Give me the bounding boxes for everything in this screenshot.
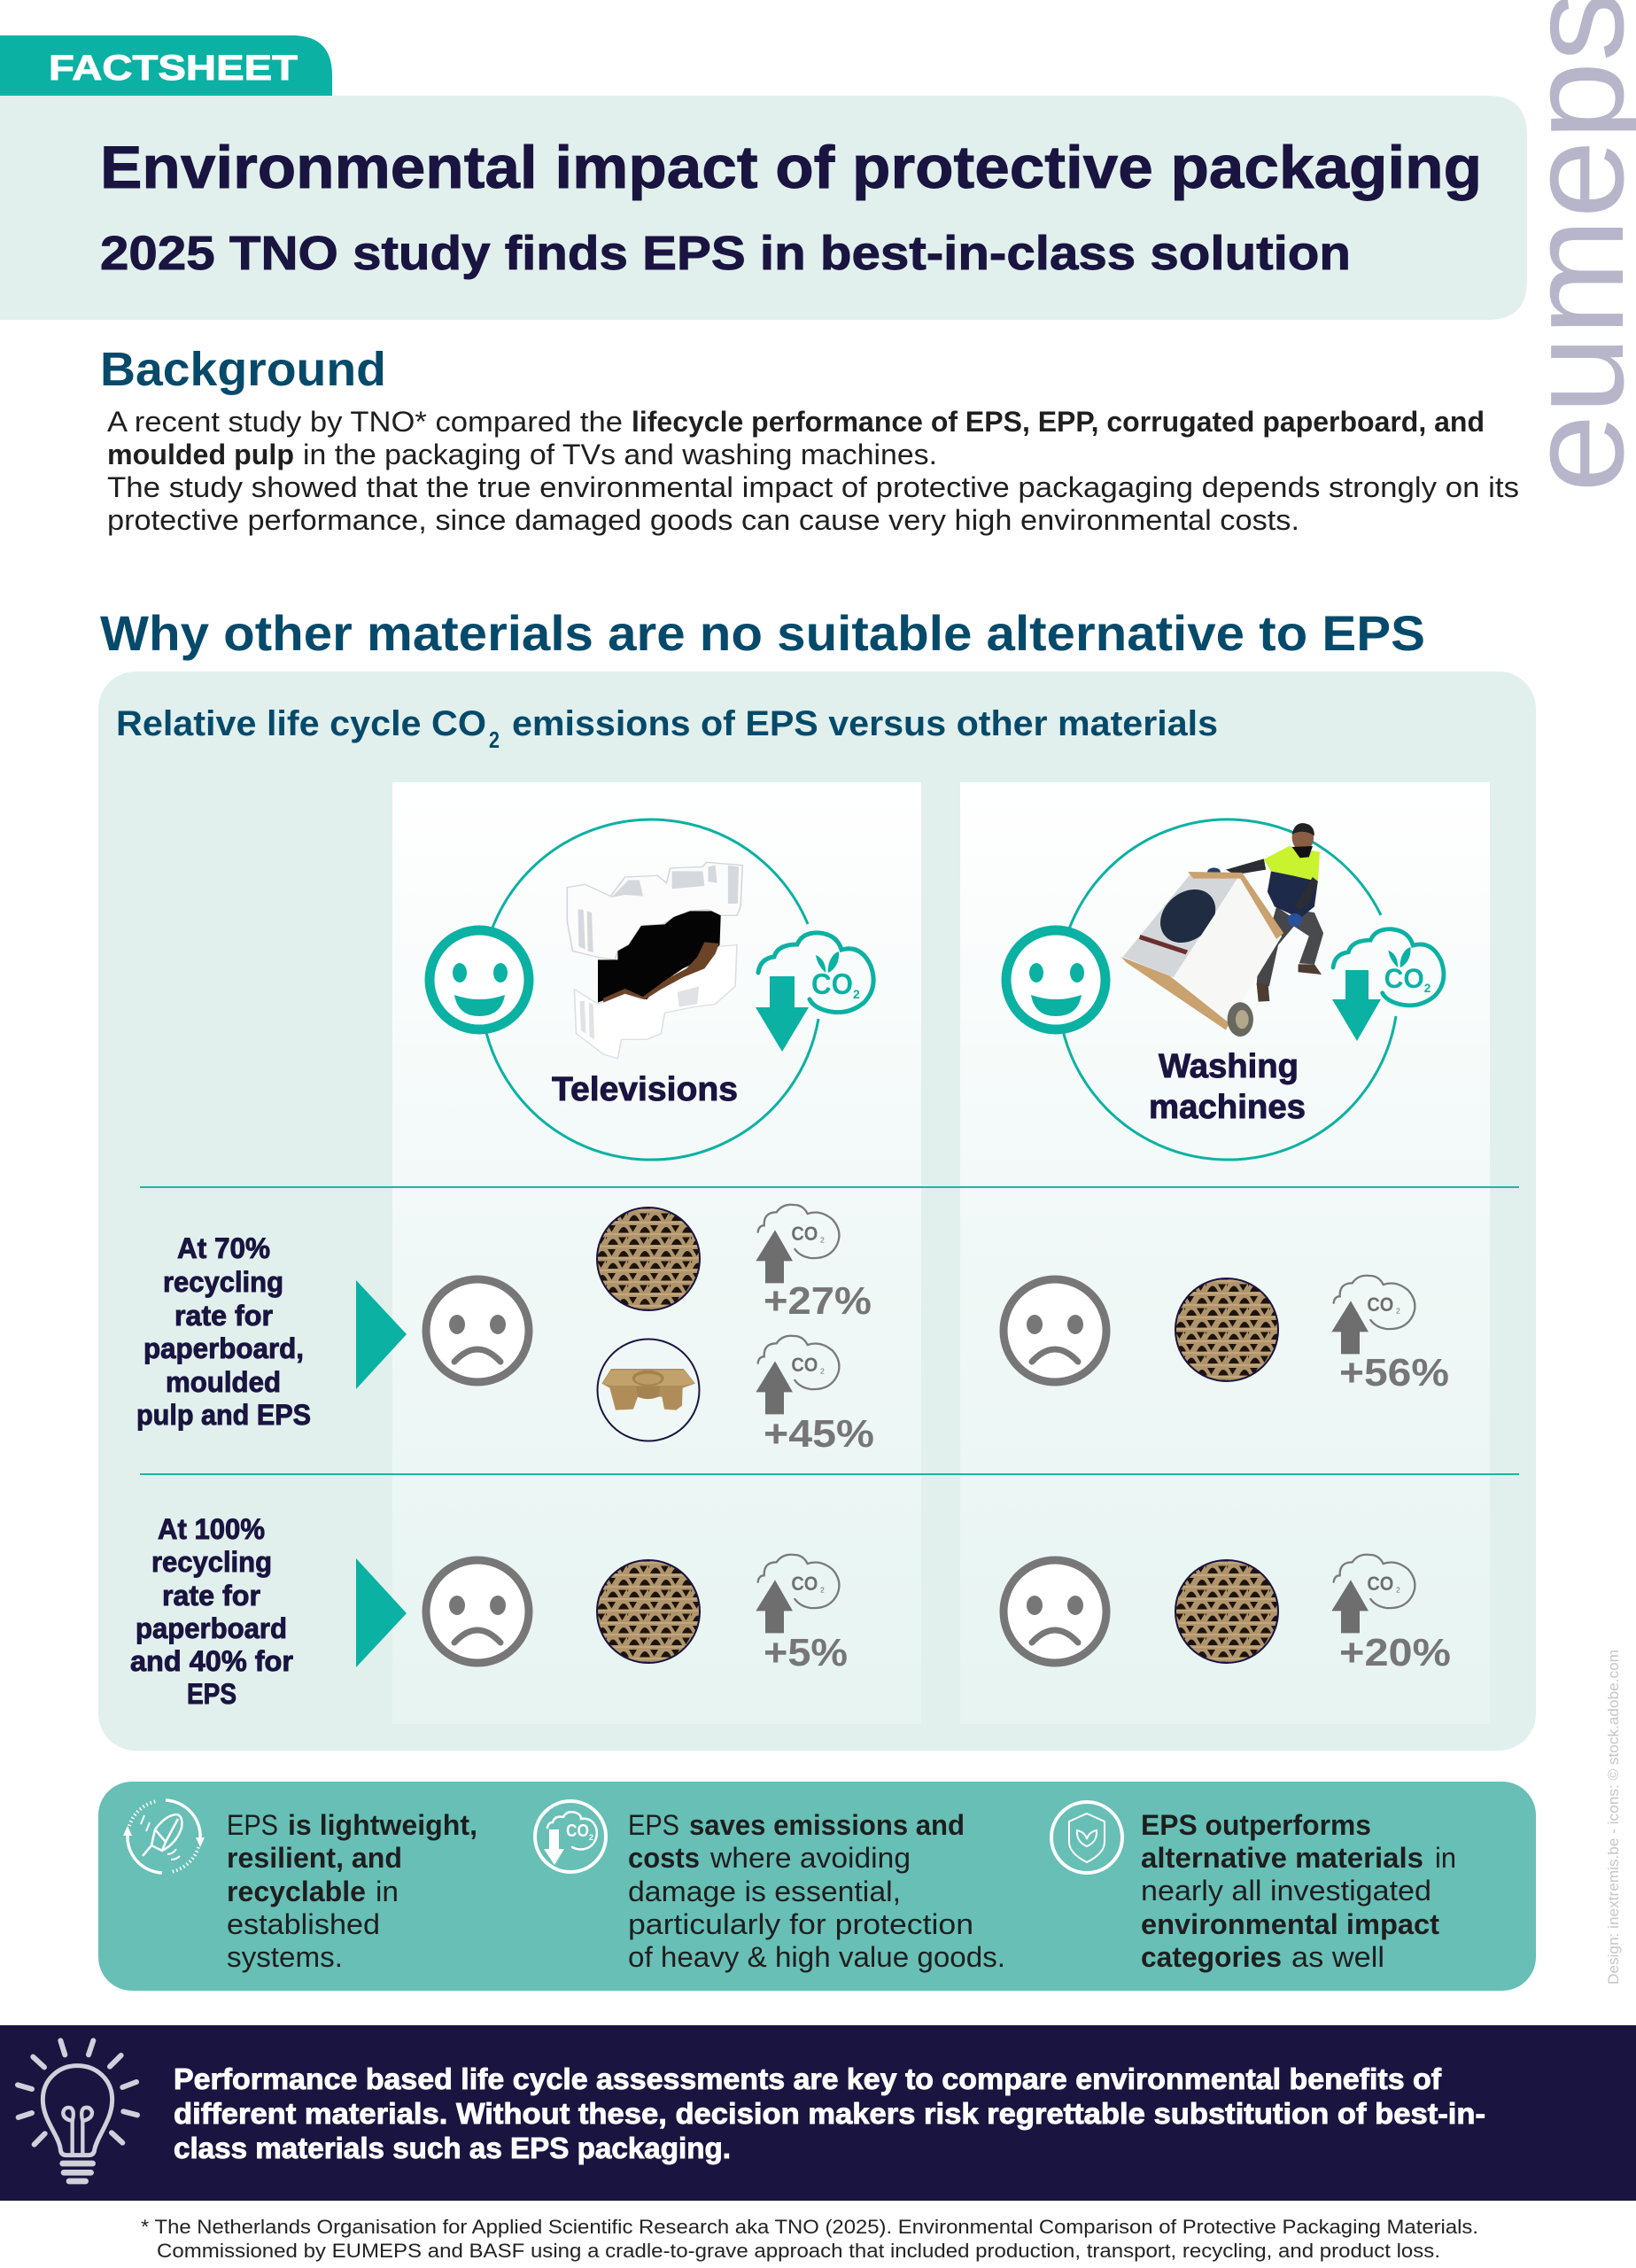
text: outperforms: categories xyxy=(1141,1941,1282,1973)
icon: CO2 increase, washing 100% xyxy=(1331,1555,1415,1633)
header panel xyxy=(0,96,1527,320)
subtitle: 2025 TNO study finds EPS in best-in-class solution xyxy=(100,227,1351,280)
icon: CO2 reduction xyxy=(1332,929,1444,1041)
panel heading: Relative life cycle CO xyxy=(116,704,486,743)
text: saves emissions xyxy=(628,1809,1005,1973)
row label: 70% recycling: paperboard, xyxy=(143,1332,304,1364)
text: outperforms: environmental impact xyxy=(1141,1908,1439,1940)
callout text: class materials such as EPS packaging. xyxy=(174,2132,731,2164)
arrow: row 1 xyxy=(356,1280,407,1389)
icon: feather recycling xyxy=(123,1800,205,1873)
text: lightweight: recyclable xyxy=(227,1876,366,1907)
icon: CO2 increase, washing 70% xyxy=(1331,1276,1415,1354)
text: lightweight: established xyxy=(227,1908,380,1940)
row label: 70% recycling: At 70% xyxy=(177,1232,270,1264)
text: lightweight: systems. xyxy=(227,1941,343,1973)
callout text: different materials. Without these, decision makers risk regrettable substitution of best-in- xyxy=(174,2097,1485,2130)
row label: 100% recycling xyxy=(130,1513,293,1710)
text block: background: protective performance, since damaged goods can cause very high environmental costs. xyxy=(107,504,1299,536)
image: corrugated paperboard washing 70% xyxy=(1175,1278,1278,1381)
label: washing machines xyxy=(1149,1048,1306,1126)
value: +45%: +45% xyxy=(764,1412,874,1456)
text: saves emissions: where avoiding xyxy=(709,1842,911,1874)
label: televisions: Televisions xyxy=(552,1071,738,1108)
icon: sad face washing 70% xyxy=(1004,1279,1106,1382)
image: corrugated paperboard washing 100% xyxy=(1175,1560,1278,1663)
row label: 100% recycling: EPS xyxy=(187,1678,236,1710)
televisions group xyxy=(430,819,873,1160)
text: outperforms: as well xyxy=(1291,1941,1384,1973)
icon: shield with leaves xyxy=(1051,1802,1122,1873)
text block: background xyxy=(107,406,1519,536)
text: outperforms: EPS outperforms xyxy=(1141,1809,1371,1841)
panel heading: 2 xyxy=(489,726,500,753)
icon: CO2 reduction xyxy=(756,933,873,1052)
icon: CO2 increase, washing 70%: 2 xyxy=(1396,1307,1400,1316)
text block: background: A recent study by TNO* compared the xyxy=(107,406,623,438)
image: corrugated paperboard TV 100% xyxy=(597,1560,700,1663)
divider line xyxy=(140,1186,1519,1188)
text block: background: lifecycle performance of EPS, EPP, corrugated paperboard, and xyxy=(632,406,1485,438)
heading: background: Background xyxy=(100,343,386,396)
icon: CO2 reduction: CO xyxy=(811,967,853,1000)
image: EPS foam television packaging xyxy=(567,862,742,1059)
footnote: Commissioned by EUMEPS and BASF using a cradle-to-grave approach that included production, transport, recycling, and product loss. xyxy=(157,2240,1440,2262)
text block: background: in the packaging of TVs and washing machines. xyxy=(303,439,937,470)
text block: background: The study showed that the true environmental impact of protective packagaging depends strongly on its xyxy=(107,471,1519,503)
divider line xyxy=(140,1473,1519,1475)
label: washing machines: machines xyxy=(1149,1089,1306,1126)
image: corrugated paperboard TV 70% xyxy=(597,1208,700,1310)
washing machines group xyxy=(1006,819,1444,1160)
heading: why other materials: Why other materials are no suitable alternative to EPS xyxy=(100,605,1425,661)
callout text: Performance based life cycle assessments are key to compare environmental benefits of xyxy=(174,2062,1442,2095)
icon: CO2 savings xyxy=(535,1801,606,1872)
icon: CO2 savings: 2 xyxy=(589,1833,593,1842)
value: +56%: +56% xyxy=(1339,1351,1449,1394)
text: saves emissions: EPS xyxy=(628,1809,679,1841)
icon: CO2 increase, TV 100%: CO xyxy=(791,1573,818,1595)
icon: sad face TV 70% xyxy=(426,1279,529,1382)
icon: sad face TV 100% xyxy=(426,1560,529,1663)
row label: 70% recycling: moulded xyxy=(166,1366,281,1398)
icon: CO2 increase, TV paperboard: CO xyxy=(791,1223,818,1245)
icon: CO2 increase, TV pulp: CO xyxy=(791,1354,818,1376)
text: lightweight xyxy=(227,1809,477,1973)
text: lightweight: is lightweight, xyxy=(288,1809,477,1841)
arrow: row 2 xyxy=(356,1558,407,1667)
icon: CO2 increase, TV pulp: 2 xyxy=(820,1367,825,1376)
icon: happy face xyxy=(430,930,529,1029)
icon: CO2 increase, washing 70%: CO xyxy=(1367,1293,1393,1316)
panel heading xyxy=(116,704,1218,753)
row label: 100% recycling: rate for xyxy=(162,1580,260,1612)
icon: CO2 increase, TV 100% xyxy=(756,1555,839,1633)
row label: 70% recycling: rate for xyxy=(174,1300,273,1332)
value: +20%: +20% xyxy=(1339,1631,1451,1674)
text: saves emissions: particularly for protection xyxy=(628,1908,973,1940)
footnote xyxy=(141,2216,1478,2262)
factsheet tab xyxy=(0,35,332,96)
icon: CO2 increase, washing 100%: 2 xyxy=(1396,1586,1400,1595)
text: outperforms xyxy=(1141,1809,1456,1973)
icon: happy face xyxy=(1006,930,1105,1029)
image: worker with packaged washing machine xyxy=(1121,823,1323,1037)
text: saves emissions: damage is essential, xyxy=(628,1876,901,1907)
icon: CO2 increase, TV 100%: 2 xyxy=(820,1586,825,1595)
row label: 100% recycling: recycling xyxy=(151,1546,272,1578)
factsheet tab: FACTSHEET xyxy=(49,49,298,88)
text: lightweight: in xyxy=(376,1876,399,1907)
callout text xyxy=(174,2062,1485,2164)
panel heading: emissions of EPS versus other materials xyxy=(512,704,1218,743)
icon: light bulb xyxy=(18,2040,137,2181)
panel: key benefits xyxy=(98,1782,1536,1991)
row label: 70% recycling xyxy=(136,1232,311,1431)
text: outperforms: alternative materials xyxy=(1141,1842,1423,1874)
value: +27%: +27% xyxy=(764,1279,872,1323)
text: saves emissions: saves emissions and xyxy=(689,1809,965,1841)
icon: CO2 increase, TV pulp xyxy=(756,1336,839,1414)
image: moulded pulp tray xyxy=(597,1340,700,1441)
panel: relative emissions xyxy=(98,672,1536,1751)
icon: CO2 reduction: 2 xyxy=(853,987,860,1001)
icon: CO2 increase, TV paperboard: 2 xyxy=(820,1236,825,1245)
column: washing machines xyxy=(960,782,1490,1724)
text: lightweight: EPS xyxy=(227,1809,278,1841)
label: washing machines: Washing xyxy=(1159,1048,1299,1085)
icon: CO2 increase, TV paperboard xyxy=(756,1205,839,1283)
row label: 100% recycling: At 100% xyxy=(158,1513,265,1545)
row label: 100% recycling: and 40% for xyxy=(130,1645,293,1677)
footnote: * The Netherlands Organisation for Applied Scientific Research aka TNO (2025). Environmental Comparison of Protective Packaging Materials. xyxy=(141,2216,1478,2238)
column: televisions xyxy=(392,782,921,1724)
title: Environmental impact of protective packaging xyxy=(100,134,1482,201)
text: outperforms: in xyxy=(1435,1842,1456,1874)
text block: background: moulded pulp xyxy=(107,439,294,470)
icon: CO2 reduction: 2 xyxy=(1424,982,1431,995)
row label: 100% recycling: paperboard xyxy=(136,1612,287,1644)
text: outperforms: nearly all investigated xyxy=(1141,1875,1431,1907)
text: saves emissions: of heavy & high value goods. xyxy=(628,1941,1005,1973)
icon: sad face washing 100% xyxy=(1004,1560,1106,1663)
icon: CO2 increase, washing 100%: CO xyxy=(1367,1573,1393,1595)
icon: CO2 savings: CO xyxy=(566,1821,589,1841)
row label: 70% recycling: pulp and EPS xyxy=(136,1399,311,1431)
row label: 70% recycling: recycling xyxy=(163,1266,283,1298)
value: +5%: +5% xyxy=(764,1631,848,1674)
text: saves emissions: costs xyxy=(628,1842,700,1874)
callout band xyxy=(0,2025,1636,2201)
text: lightweight: resilient, and xyxy=(227,1842,402,1874)
icon: CO2 reduction: CO xyxy=(1384,962,1424,994)
credit: Design: inextremis.be - icons: © stock.adobe.com xyxy=(1605,1650,1622,1984)
